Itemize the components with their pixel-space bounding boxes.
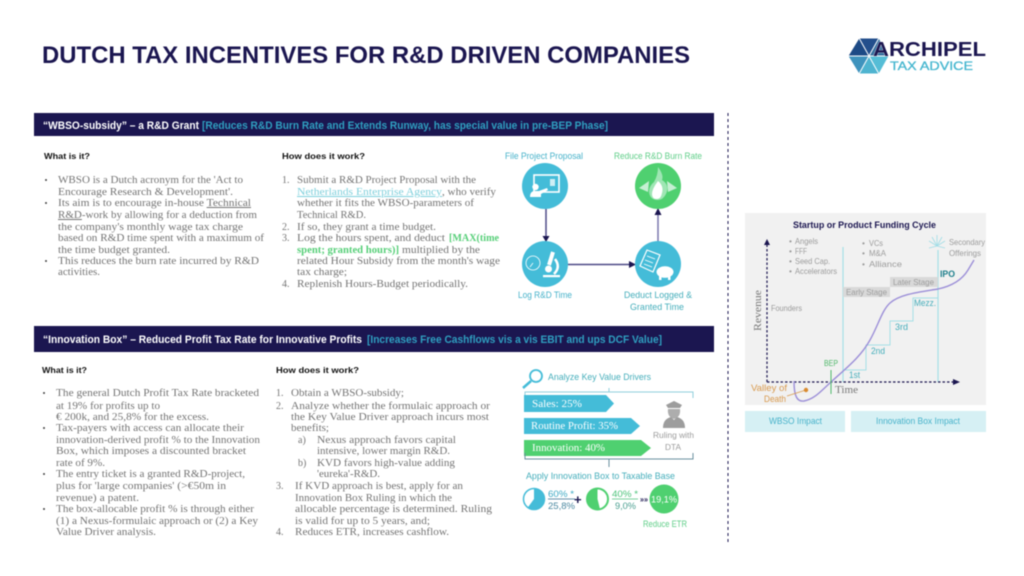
panel: WBSO what is it: Its aim is to encourage in-house Technical	[58, 198, 251, 209]
panel: WBSO how does it work: Log the hours spent, and deduct	[297, 233, 445, 244]
panel: Innovation Box what is it: (1) a Nexus-formulaic approach or (2) a Key	[56, 516, 258, 527]
funding steps	[843, 298, 938, 370]
panel: WBSO how does it work: [MAX(time	[449, 233, 500, 244]
valley of death: Death	[764, 394, 786, 404]
panel: Innovation Box banner: [Increases Free Cashflows vis a vis EBIT and ups DCF Value]	[367, 334, 662, 346]
label: ruling with DTA	[653, 430, 694, 452]
panel: Innovation Box what is it: The general Dutch Profit Tax Rate bracketed	[56, 388, 259, 399]
box: Innovation Box impact	[851, 411, 986, 432]
stage markers	[843, 247, 938, 382]
panel: WBSO how does it work: 1.	[282, 175, 290, 186]
heading: analyze key value drivers: Analyze Key Value Drivers	[548, 372, 651, 382]
panel: Innovation Box how does it work: 'eureka'-R&D.	[317, 469, 380, 480]
investor lists: Accelerators	[795, 266, 837, 276]
panel: WBSO how does it work: 2.	[282, 222, 290, 233]
panel: Innovation Box how does it work	[276, 365, 492, 538]
box: WBSO impact	[745, 411, 845, 432]
panel: Innovation Box banner	[34, 326, 714, 352]
panel: WBSO how does it work: spent; granted hours)]	[297, 245, 399, 256]
panel: Innovation Box what is it: plus for 'large companies' (>€50m in	[56, 481, 226, 492]
formula: 60% x 25,8%: 25,8%	[548, 501, 575, 511]
panel: WBSO what is it: R&D-work by allowing for a deduction from	[58, 210, 257, 221]
panel: WBSO how does it work: How does it work?	[282, 151, 365, 161]
result circle: 19,1%: 19,1%	[651, 494, 678, 506]
investor lists: Founders	[771, 303, 802, 313]
arrowheads	[764, 239, 960, 385]
label: reduce ETR: Reduce ETR	[643, 519, 687, 529]
funding rounds labels: 1st	[849, 370, 860, 380]
panel: Innovation Box how does it work: If KVD approach is best, apply for an	[295, 481, 463, 492]
valley of death: Valley of	[751, 383, 788, 393]
valley of death	[751, 383, 808, 404]
formula: 40% x 9,0%	[612, 489, 638, 511]
icon: magnifier	[523, 370, 542, 388]
icon: log R&D time	[522, 241, 568, 287]
arrow: log to deduct	[568, 261, 636, 268]
box: Innovation Box impact: Innovation Box Impact	[876, 416, 960, 426]
panel: Innovation Box how does it work: Innovation Box Ruling in which the	[295, 493, 453, 504]
investor lists: VCs	[869, 238, 883, 248]
panel: Innovation Box how does it work: benefits;	[291, 423, 329, 434]
panel: Innovation Box what is it	[42, 365, 260, 538]
diagram labels	[505, 151, 702, 312]
icon: firework	[929, 235, 945, 248]
panel: Innovation Box what is it: at 19% for profits up to	[56, 401, 160, 412]
chart: startup or product funding cycle	[745, 213, 986, 405]
heading: apply innovation box: Apply Innovation Box to Taxable Base	[526, 471, 675, 481]
panel: Innovation Box how does it work: is valid for up to 5 years, and;	[295, 516, 430, 527]
logo: Archipel Tax Advice: TAX ADVICE	[890, 59, 973, 73]
pie: 40%	[587, 488, 608, 510]
panel: Innovation Box what is it: Value Driver analysis.	[56, 527, 156, 538]
logo: Archipel Tax Advice: ARCHIPEL	[873, 39, 986, 61]
BEP marker: BEP	[824, 358, 838, 368]
growth curve	[794, 260, 974, 401]
panel: Innovation Box what is it: The entry ticket is a granted R&D-project,	[56, 469, 245, 480]
panel: Innovation Box how does it work: a)	[298, 435, 306, 446]
investor lists: •	[789, 256, 792, 266]
panel: WBSO how does it work: Technical R&D.	[297, 210, 366, 221]
arrow: deduct to reduce	[654, 208, 662, 242]
investor lists: Seed Cap.	[795, 256, 830, 266]
label: ruling with DTA: DTA	[665, 442, 681, 452]
formula: 40% x 9,0%: 40% *	[612, 489, 638, 499]
chart title: Startup or Product Funding Cycle	[793, 220, 936, 230]
panel: WBSO how does it work: Submit a R&D Project Proposal with the	[297, 175, 477, 186]
funding rounds labels: IPO	[940, 269, 955, 279]
axis labels	[753, 290, 858, 396]
icon: reduce burn rate flame	[635, 163, 681, 209]
panel: WBSO what is it: the time budget granted.	[58, 245, 170, 256]
stage: early: Early Stage	[846, 287, 887, 297]
panel: Innovation Box how does it work: intensive, lower margin R&D.	[317, 446, 450, 457]
panel: Innovation Box what is it: Tax-payers with access can allocate their	[56, 423, 245, 434]
investor lists: •	[789, 246, 792, 256]
panel: WBSO how does it work: tax charge;	[297, 267, 347, 278]
panel: WBSO what is it	[44, 151, 265, 278]
icon: tax officer	[663, 401, 685, 428]
funding rounds labels: 3rd	[895, 322, 908, 332]
panel: WBSO what is it: based on R&D time spent with a maximum of	[58, 233, 265, 244]
label: ruling with DTA: Ruling with	[653, 430, 694, 440]
title: DUTCH TAX INCENTIVES FOR R&D DRIVEN COMPANIES	[42, 42, 690, 69]
panel: Innovation Box how does it work: allocable percentage is determined. Ruling	[295, 504, 492, 515]
panel: Innovation Box what is it: The box-allocable profit % is through either	[56, 504, 255, 515]
investor lists: Angels	[795, 236, 818, 246]
arrow: proposal to log	[542, 209, 550, 242]
investor lists: •	[789, 236, 792, 246]
panel: WBSO how does it work: Netherlands Enterprise Agency	[297, 187, 442, 198]
axis labels: Revenue	[753, 290, 764, 331]
panel: WBSO how does it work: , who verify	[442, 187, 496, 198]
panel: Innovation Box banner: “Innovation Box” – Reduced Profit Tax Rate for Innovative Profits	[43, 334, 362, 346]
panel: Innovation Box what is it: revenue) a patent.	[56, 493, 139, 504]
diagram labels: Log R&D Time	[518, 290, 572, 300]
logo: Archipel Tax Advice	[848, 38, 986, 74]
panel: WBSO how does it work: If so, they grant a time budget.	[297, 222, 436, 233]
panel: key value drivers chart	[523, 370, 694, 529]
panel: Innovation Box how does it work: KVD favors high-value adding	[317, 458, 455, 469]
bracket: top	[525, 388, 693, 398]
panel: Innovation Box how does it work: Reduces ETR, increases cashflow.	[295, 527, 449, 538]
panel: WBSO what is it: This reduces the burn rate incurred by R&D	[58, 256, 259, 267]
investor lists: Secondary	[949, 237, 986, 247]
investor lists: •	[862, 259, 865, 269]
panel: Innovation Box what is it: innovation-derived profit % to the Innovation	[56, 435, 260, 446]
panel: Innovation Box how does it work: 2.	[276, 401, 284, 412]
diagram labels: Deduct Logged &	[624, 290, 692, 300]
bar: innovation	[524, 440, 651, 456]
panel: WBSO how does it work: 4.	[282, 279, 290, 290]
diagram labels: Reduce R&D Burn Rate	[614, 151, 702, 161]
chevrons: »»	[640, 495, 648, 504]
panel: WBSO how does it work: 3.	[282, 233, 290, 244]
panel: Innovation Box what is it: Box, which imposes a discounted bracket	[56, 446, 246, 457]
panel: Innovation Box how does it work: 4.	[276, 527, 284, 538]
box: WBSO impact: WBSO Impact	[769, 416, 822, 426]
investor lists: FFF	[795, 246, 807, 256]
bar: sales: Sales: 25%	[532, 399, 582, 410]
investor lists: •	[862, 238, 865, 248]
panel: Innovation Box how does it work: Analyze whether the formulaic approach or	[291, 401, 491, 412]
panel: Innovation Box how does it work: 1.	[276, 388, 284, 399]
panel: Innovation Box how does it work: Nexus approach favors capital	[317, 435, 456, 446]
funding rounds labels	[849, 269, 955, 380]
panel: WBSO how does it work: whether it fits the WBSO-parameters of	[297, 198, 475, 209]
funding rounds labels: 2nd	[871, 346, 885, 356]
panel: WBSO how does it work: related Hour Subsidy from the month's wage	[297, 256, 501, 267]
funding rounds labels: Mezz.	[914, 298, 936, 308]
BEP marker	[824, 358, 838, 394]
panel: Innovation Box what is it: What is it?	[42, 365, 87, 375]
panel: WBSO what is it: the company's monthly wage tax charge	[58, 222, 244, 233]
panel: Innovation Box what is it: rate of 9%.	[56, 458, 105, 469]
bar: routine profit	[524, 418, 640, 434]
panel: WBSO how does it work: multiplied by the	[402, 245, 481, 256]
panel: WBSO how does it work: Replenish Hours-Budget periodically.	[297, 279, 468, 290]
icon: file project proposal	[522, 163, 568, 209]
formula: 40% x 9,0%: 9,0%	[615, 501, 636, 511]
bar: routine profit: Routine Profit: 35%	[531, 421, 618, 432]
pie: 60%	[524, 488, 544, 510]
bracket: bottom	[525, 453, 693, 467]
diagram labels: File Project Proposal	[505, 151, 583, 161]
panel: WBSO what is it: activities.	[58, 267, 100, 278]
panel: Innovation Box how does it work: the Key Value Driver approach incurs most	[291, 412, 489, 423]
panel: WBSO banner	[34, 113, 714, 136]
bar: innovation: Innovation: 40%	[532, 443, 605, 454]
bar: sales	[524, 395, 614, 412]
investor lists	[771, 236, 986, 313]
investor lists: •	[789, 266, 792, 276]
axis labels: Time	[835, 385, 858, 396]
panel: WBSO banner: [Reduces R&D Burn Rate and Extends Runway, has special value in pre-BEP Phase]	[202, 120, 608, 132]
panel: Innovation Box how does it work: b)	[298, 458, 306, 469]
panel: WBSO what is it: WBSO is a Dutch acronym for the 'Act to	[58, 175, 243, 186]
investor lists: M&A	[869, 248, 886, 258]
panel: WBSO process diagram	[505, 151, 702, 312]
diagram labels: Granted Time	[630, 302, 684, 312]
result circle: 19,1%	[650, 484, 678, 514]
panel: Innovation Box what is it: € 200k, and 25,8% for the excess.	[56, 412, 209, 423]
panel: WBSO banner: “WBSO-subsidy” – a R&D Grant	[43, 120, 199, 132]
panel: Innovation Box how does it work: Obtain a WBSO-subsidy;	[291, 388, 404, 399]
panel: WBSO what is it: Encourage Research & Development'.	[58, 187, 233, 198]
investor lists: Alliance	[869, 259, 902, 269]
formula: 60% x 25,8%	[548, 489, 575, 511]
axes	[767, 244, 955, 382]
panel: WBSO what is it: What is it?	[44, 151, 90, 161]
panel: Innovation Box how does it work: 3.	[276, 481, 284, 492]
plus sign: +	[574, 492, 582, 507]
panel: Innovation Box how does it work: How does it work?	[276, 365, 359, 375]
stage: later: Later Stage	[893, 277, 934, 287]
panel: WBSO how does it work	[282, 151, 501, 290]
investor lists: •	[862, 248, 865, 258]
investor lists: Offerings	[949, 248, 981, 258]
formula: 60% x 25,8%: 60% *	[548, 489, 574, 499]
icon: deduct piggy bank	[635, 241, 681, 287]
